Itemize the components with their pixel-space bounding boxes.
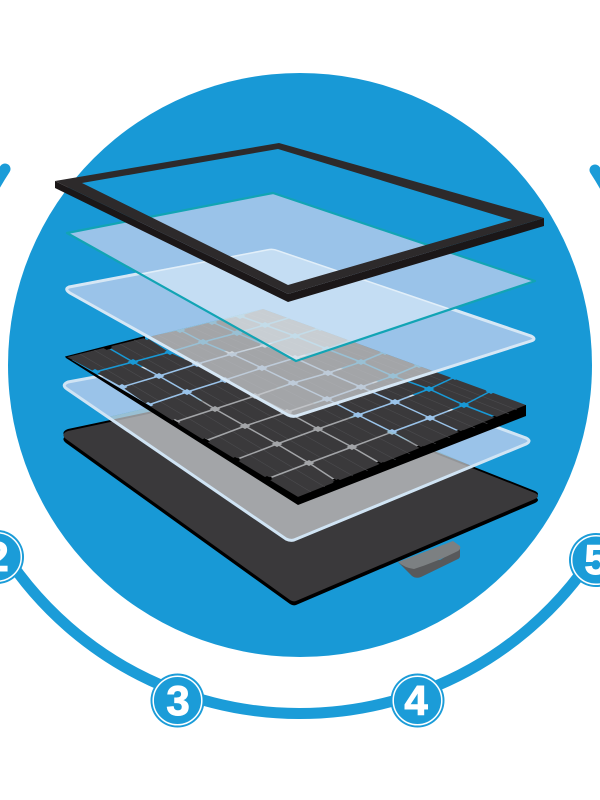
background circle [8,73,592,657]
badge: number 2 [0,530,24,584]
numbered timeline arc [0,169,600,714]
cell panel dark edge [65,336,526,505]
badge: number 5 [569,533,600,587]
badge: number 3: 3 [166,677,190,724]
cell grid [67,309,526,497]
badge: number 4 [390,674,444,728]
icon: junction box [398,541,460,578]
layer: solar cells [65,309,526,505]
badge: number 3 [150,674,204,728]
badge: number 4: 4 [404,677,428,724]
layer: backsheet [63,386,538,605]
layer: upper encapsulant sheet [67,249,534,416]
layer: glass sheet [67,193,535,361]
layer: aluminium frame [55,143,544,302]
layer: lower encapsulant sheet [64,345,529,540]
